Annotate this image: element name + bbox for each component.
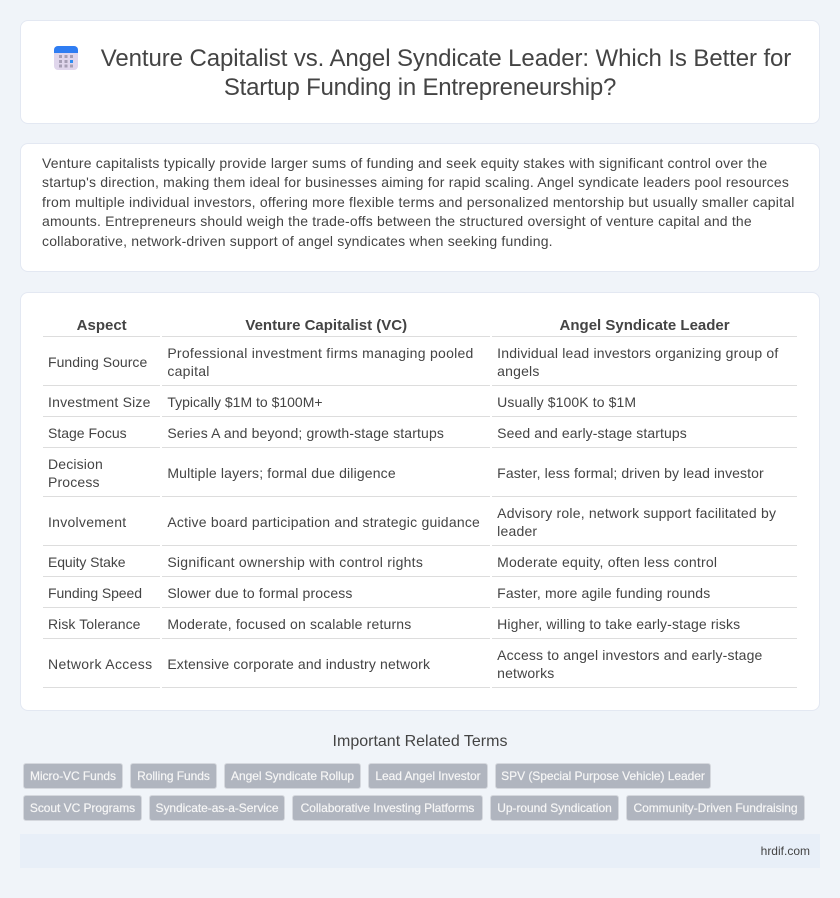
comparison table: Aspect: [77, 317, 127, 334]
comparison table: Network Access: [48, 656, 152, 672]
comparison table: Faster, less formal; driven by lead investor: [497, 465, 764, 481]
related term tags: Micro-VC Funds: [30, 769, 116, 783]
comparison table: Slower due to formal process: [167, 585, 353, 601]
comparison table: networks: [497, 665, 554, 681]
comparison table: Stage Focus: [48, 425, 127, 441]
related term tags: Lead Angel Investor: [375, 769, 481, 783]
comparison table: Seed and early-stage startups: [497, 425, 687, 441]
related terms heading: Important Related Terms: [333, 733, 507, 750]
related term tags: Collaborative Investing Platforms: [301, 801, 474, 815]
comparison table: Process: [48, 474, 100, 490]
related term tags: Scout VC Programs: [30, 801, 135, 815]
summary text: Venture capitalists typically provide larger sums of funding and seek equity stakes with significant control over the: [42, 155, 767, 171]
comparison table: [43, 317, 797, 688]
summary text: from multiple individual investors, offering more flexible terms and personalized mentorship but usually smaller capital: [42, 194, 795, 210]
comparison table: capital: [167, 363, 210, 379]
footer source: hrdif.com: [761, 844, 810, 858]
comparison table: Advisory role, network support facilitated by: [497, 505, 776, 521]
comparison table: Significant ownership with control rights: [167, 554, 423, 570]
related term tags: Community-Driven Fundraising: [634, 801, 798, 815]
summary text: startup's direction, making them ideal for businesses aiming for rapid scaling. Angel syndicate leaders pool resources: [42, 174, 789, 190]
comparison table: Moderate equity, often less control: [497, 554, 717, 570]
comparison table: Access to angel investors and early-stage: [497, 647, 762, 663]
comparison table: angels: [497, 363, 540, 379]
related term tags: Syndicate-as-a-Service: [156, 801, 278, 815]
comparison table: Faster, more agile funding rounds: [497, 585, 710, 601]
related term tags: Angel Syndicate Rollup: [231, 769, 354, 783]
comparison table: Professional investment firms managing pooled: [167, 345, 474, 361]
comparison table: Risk Tolerance: [48, 616, 141, 632]
comparison table: Active board participation and strategic guidance: [167, 514, 480, 530]
comparison table: Funding Source: [48, 354, 147, 370]
comparison table: Typically $1M to $100M+: [167, 394, 323, 410]
title: [100, 45, 791, 101]
comparison table: Venture Capitalist (VC): [245, 317, 407, 334]
comparison table: Individual lead investors organizing group of: [497, 345, 778, 361]
summary text: collaborative, network-driven support of angel syndicates when seeking funding.: [42, 233, 553, 249]
comparison table: Equity Stake: [48, 554, 125, 570]
panel: summary: [20, 143, 820, 272]
footer bar: [20, 834, 820, 868]
summary text: [42, 155, 795, 249]
title: Venture Capitalist vs. Angel Syndicate Leader: Which Is Better for: [101, 45, 791, 72]
comparison table: Investment Size: [48, 394, 151, 410]
comparison table: Usually $100K to $1M: [497, 394, 636, 410]
summary text: amounts. Entrepreneurs should weigh the trade-offs between the structured oversight of venture capital and the: [42, 213, 752, 229]
related term tags: [23, 763, 805, 821]
related term tags: SPV (Special Purpose Vehicle) Leader: [501, 769, 705, 783]
comparison table: Extensive corporate and industry network: [167, 656, 430, 672]
icon: calendar: [54, 46, 78, 70]
comparison table: Funding Speed: [48, 585, 142, 601]
comparison table: Moderate, focused on scalable returns: [167, 616, 411, 632]
comparison table: Angel Syndicate Leader: [560, 317, 730, 334]
related term tags: Rolling Funds: [137, 769, 210, 783]
panel: comparison table: [20, 292, 820, 711]
title card: [20, 20, 820, 124]
comparison table: Involvement: [48, 514, 126, 530]
comparison table: Multiple layers; formal due diligence: [167, 465, 396, 481]
comparison table: Higher, willing to take early-stage risks: [497, 616, 740, 632]
comparison table: leader: [497, 523, 537, 539]
comparison table: Series A and beyond; growth-stage startups: [167, 425, 444, 441]
title: Startup Funding in Entrepreneurship?: [224, 74, 616, 101]
related term tags: Up-round Syndication: [497, 801, 612, 815]
comparison table: Decision: [48, 456, 103, 472]
